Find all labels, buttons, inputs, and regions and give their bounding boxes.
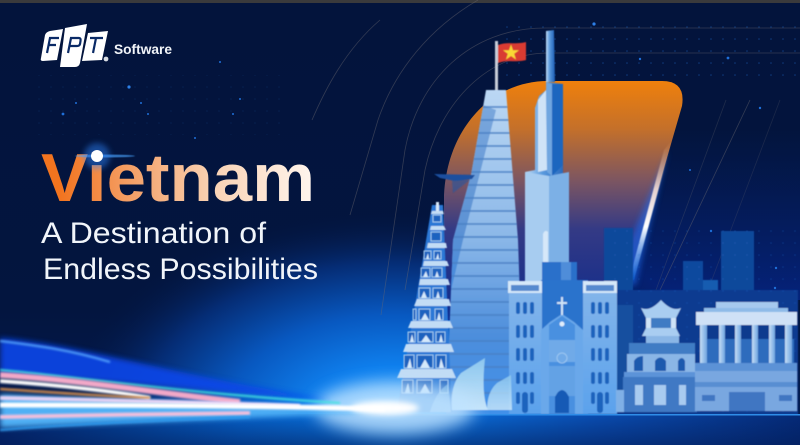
title sparkle bbox=[75, 143, 135, 169]
flag star bbox=[503, 44, 519, 60]
cathedral bbox=[508, 280, 617, 415]
pagoda windows bbox=[402, 215, 448, 393]
FPT Software logo bbox=[41, 24, 172, 67]
subtitle: A Destination of bbox=[41, 217, 267, 250]
flag pole bbox=[495, 41, 498, 90]
cathedral facade bbox=[541, 297, 583, 414]
Software wordmark: Software bbox=[114, 41, 172, 57]
curved contour lines bbox=[312, 0, 800, 315]
mausoleum hall bbox=[695, 302, 797, 411]
title: Vietnam: Vietnam bbox=[41, 140, 315, 216]
subtitle: Endless Possibilities bbox=[43, 253, 318, 286]
Landmark 81 tower bbox=[525, 30, 577, 300]
helipad bbox=[434, 174, 475, 181]
Hanoi temple bbox=[616, 300, 697, 412]
subtitle bbox=[41, 217, 318, 286]
ground bbox=[0, 414, 800, 445]
starfield dots bbox=[30, 22, 800, 289]
city skyline bbox=[397, 30, 800, 418]
back skyline bbox=[600, 228, 800, 418]
orange arch panel bbox=[444, 81, 683, 320]
Vietnam flag bbox=[498, 42, 526, 63]
Bitexco tower bbox=[434, 41, 530, 418]
pagoda roofs bbox=[397, 211, 456, 378]
logo mark bbox=[41, 24, 108, 67]
pagoda bbox=[397, 202, 456, 412]
cross bbox=[557, 297, 567, 315]
light beam on panel edge bbox=[612, 140, 672, 285]
junk boats bbox=[430, 358, 512, 412]
light trails bbox=[0, 338, 475, 434]
